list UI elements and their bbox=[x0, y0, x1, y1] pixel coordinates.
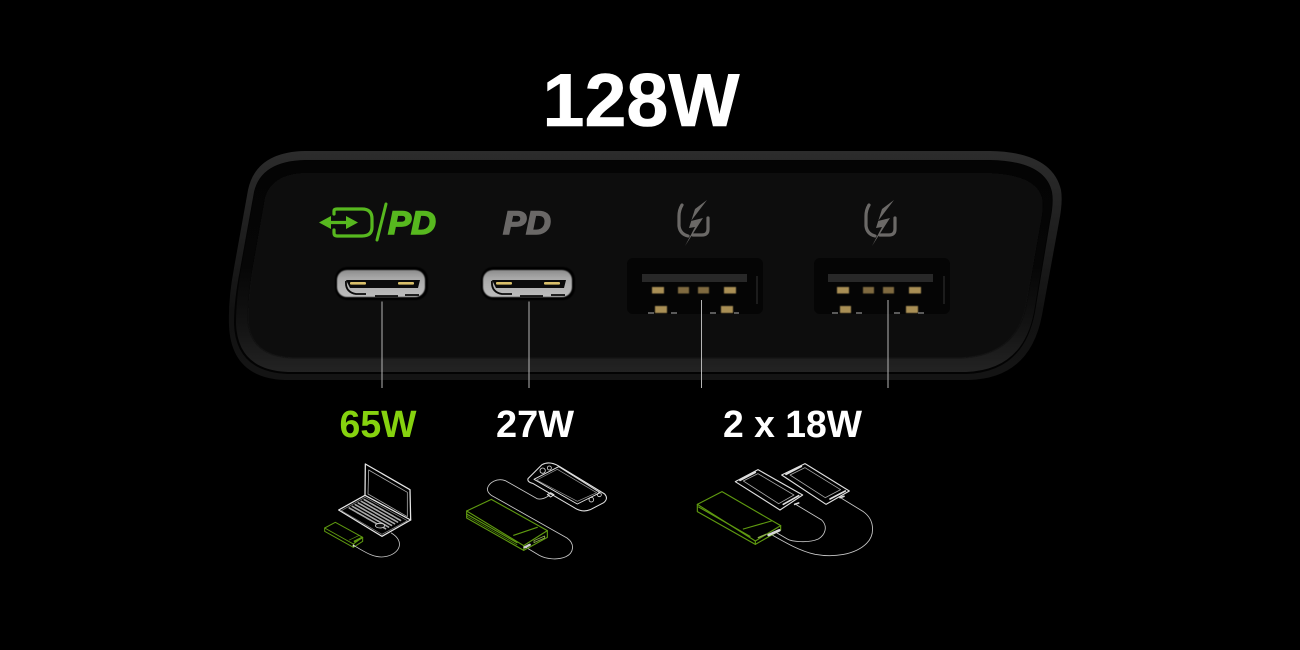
icon: input/output arrows with PD bbox=[319, 204, 436, 241]
label: 2 x 18W: 2 x 18W bbox=[723, 404, 862, 446]
USB-A port 1 bbox=[627, 258, 763, 314]
label: 65W: 65W bbox=[340, 404, 417, 446]
USB-A port 2 bbox=[814, 258, 950, 314]
label: 27W: 27W bbox=[496, 404, 574, 446]
connector lines bbox=[382, 300, 888, 388]
icon: quick charge bolt 1 bbox=[679, 200, 708, 246]
icon: game console charging from power bank bbox=[467, 463, 606, 559]
power bank body bbox=[229, 151, 1062, 380]
title: 128W bbox=[542, 58, 740, 142]
icon: PD grey: PD bbox=[503, 205, 551, 241]
icon: laptop charging from power bank bbox=[325, 464, 411, 557]
USB-C port 2 bbox=[481, 267, 575, 300]
USB-C port 1 bbox=[335, 267, 428, 300]
icon: input/output arrows with PD: PD bbox=[388, 205, 436, 241]
icon: two phones charging from power bank bbox=[697, 464, 873, 556]
icon: quick charge bolt 2 bbox=[866, 200, 895, 246]
